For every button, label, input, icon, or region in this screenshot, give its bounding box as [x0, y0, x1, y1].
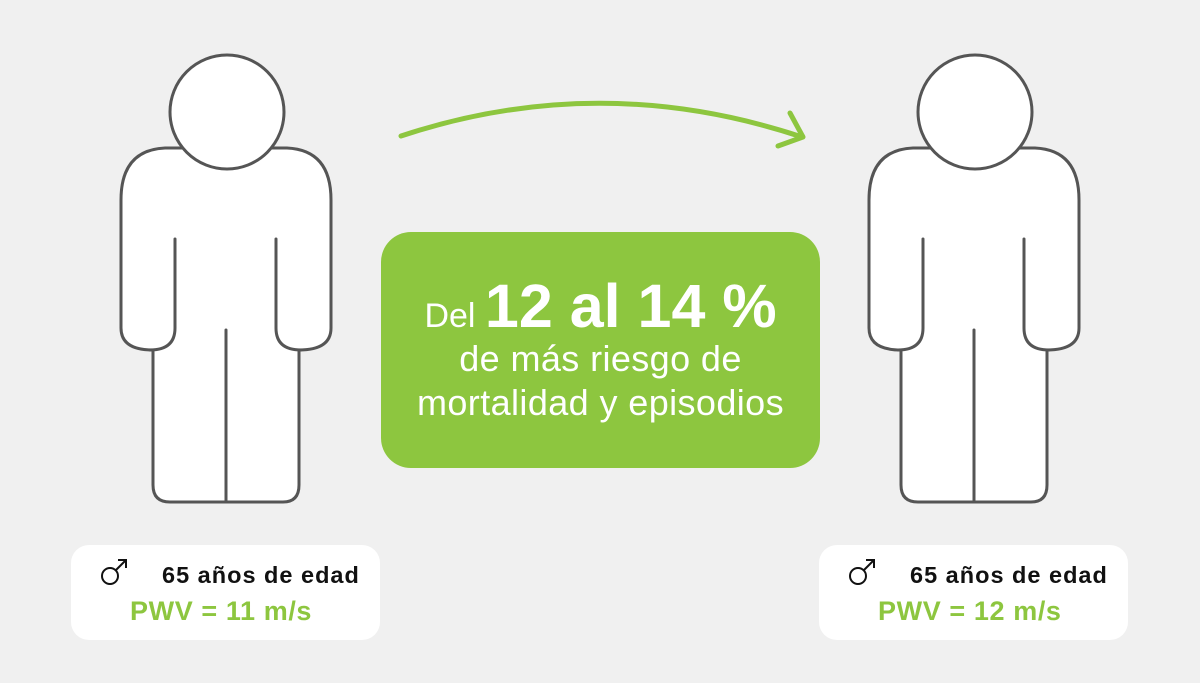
label: right person: 65 años de edad [910, 562, 1108, 588]
label: right person: PWV = 12 m/s [878, 596, 1062, 626]
label: right person [819, 545, 1128, 640]
figure: left person [121, 55, 331, 502]
label: left person [71, 545, 380, 640]
icon: male symbol [101, 559, 127, 585]
callout: risk box: Del 12 al 14 % [424, 272, 777, 340]
icon: male symbol [849, 559, 875, 585]
callout: risk box: mortalidad y episodios [417, 382, 784, 423]
callout: risk box: de más riesgo de [459, 338, 742, 379]
label: left person: 65 años de edad [162, 562, 360, 588]
label: left person: PWV = 11 m/s [130, 596, 312, 626]
callout: risk box [381, 232, 820, 468]
arrow [401, 103, 803, 146]
figure: right person [869, 55, 1079, 502]
